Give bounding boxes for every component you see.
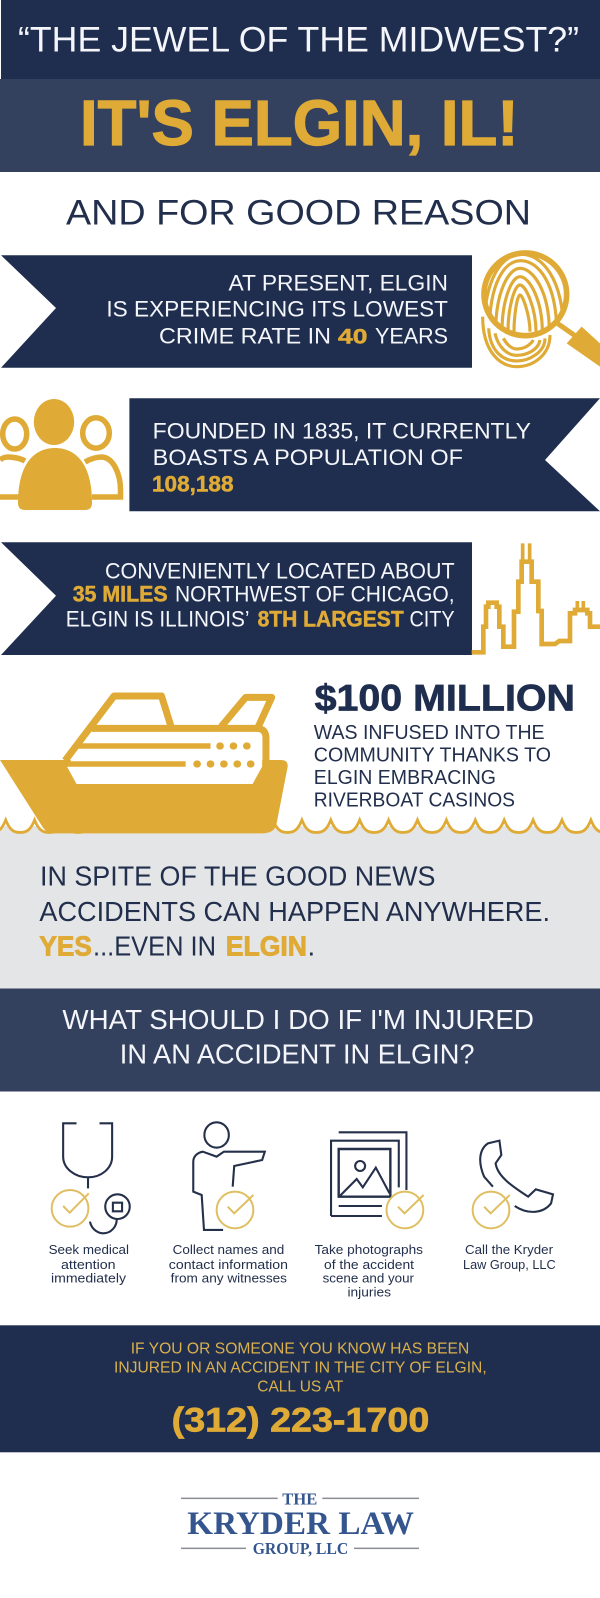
caption: collect names: Collect names and bbox=[173, 1243, 284, 1257]
call to action text: IF YOU OR SOMEONE YOU KNOW HAS BEEN bbox=[131, 1340, 469, 1357]
panel: call to action bbox=[0, 1325, 600, 1452]
icon: group of people bbox=[0, 399, 120, 510]
icon: magnifying glass over fingerprint bbox=[483, 253, 600, 367]
call to action text bbox=[114, 1340, 487, 1395]
icon: person pointing bbox=[193, 1122, 265, 1230]
caption: take photographs: Take photographs bbox=[315, 1243, 423, 1257]
caption: seek medical attention: attention bbox=[61, 1258, 116, 1272]
icon: telephone bbox=[473, 1141, 553, 1228]
crime rate text: IS EXPERIENCING ITS LOWEST bbox=[106, 297, 448, 322]
population text: BOASTS A POPULATION OF bbox=[153, 445, 463, 470]
caption: seek medical attention: immediately bbox=[51, 1272, 127, 1286]
text: accidents can happen: YES bbox=[39, 931, 92, 962]
crime rate text: 40 bbox=[338, 325, 367, 349]
crime rate text bbox=[106, 270, 448, 349]
callout: $100 million: RIVERBOAT CASINOS bbox=[314, 789, 515, 812]
logo: The Kryder Law Group: KRYDER LAW bbox=[187, 1506, 414, 1542]
question text: WHAT SHOULD I DO IF I'M INJURED bbox=[62, 1004, 534, 1035]
location text: CONVENIENTLY LOCATED ABOUT bbox=[105, 558, 455, 583]
callout: $100 million: ELGIN EMBRACING bbox=[314, 766, 496, 789]
panel: question banner bbox=[0, 988, 600, 1092]
callout: $100 million: COMMUNITY THANKS TO bbox=[314, 744, 551, 767]
location text bbox=[66, 558, 455, 632]
step captions bbox=[49, 1243, 556, 1300]
logo: The Kryder Law Group bbox=[181, 1489, 419, 1558]
text: accidents can happen: ...EVEN IN bbox=[93, 931, 216, 962]
panel: crime rate bbox=[1, 255, 472, 368]
caption: take photographs: scene and your bbox=[323, 1272, 414, 1286]
panel: population bbox=[129, 398, 600, 511]
header banner bbox=[0, 0, 600, 172]
subheading: AND FOR GOOD REASON bbox=[66, 193, 531, 232]
headline: it's Elgin: IT'S ELGIN, IL! bbox=[80, 87, 518, 159]
gray band with wave bbox=[0, 812, 600, 988]
call to action text: CALL US AT bbox=[257, 1378, 344, 1395]
caption: collect names: contact information bbox=[169, 1258, 288, 1272]
population text bbox=[152, 418, 531, 497]
title: the jewel of the midwest: “THE JEWEL OF THE MIDWEST?” bbox=[18, 20, 579, 60]
population text: FOUNDED IN 1835, IT CURRENTLY bbox=[153, 418, 531, 443]
icon: photographs bbox=[331, 1132, 424, 1228]
caption: call the firm: Call the Kryder bbox=[465, 1243, 553, 1257]
population text: 108,188 bbox=[152, 472, 234, 497]
text: accidents can happen: ELGIN bbox=[226, 931, 307, 962]
callout: $100 million: $100 MILLION bbox=[315, 678, 575, 719]
icon: riverboat bbox=[0, 696, 288, 833]
location text: CITY bbox=[410, 607, 455, 632]
text: accidents can happen: IN SPITE OF THE GOOD NEWS bbox=[40, 861, 436, 892]
crime rate text: AT PRESENT, ELGIN bbox=[228, 270, 448, 295]
caption: take photographs bbox=[315, 1243, 423, 1300]
icon: Chicago skyline bbox=[472, 543, 600, 652]
caption: call the firm bbox=[463, 1243, 556, 1272]
callout: $100 million: WAS INFUSED INTO THE bbox=[314, 721, 545, 744]
logo: The Kryder Law Group: THE bbox=[282, 1489, 317, 1508]
caption: collect names bbox=[169, 1243, 288, 1286]
location text: ELGIN IS ILLINOIS’ bbox=[66, 607, 250, 632]
caption: take photographs: injuries bbox=[348, 1286, 391, 1300]
caption: take photographs: of the accident bbox=[324, 1258, 415, 1272]
text: accidents can happen: ACCIDENTS CAN HAPPEN ANYWHERE. bbox=[39, 896, 550, 927]
location text: 8TH LARGEST bbox=[258, 607, 404, 632]
caption: seek medical attention: Seek medical bbox=[49, 1243, 129, 1257]
call to action text: INJURED IN AN ACCIDENT IN THE CITY OF ELGIN, bbox=[114, 1359, 487, 1376]
icon: stethoscope bbox=[52, 1123, 130, 1233]
location text: 35 MILES bbox=[73, 582, 168, 607]
location text: NORTHWEST OF CHICAGO, bbox=[175, 582, 455, 607]
caption: collect names: from any witnesses bbox=[171, 1272, 287, 1286]
panel: location bbox=[1, 542, 472, 655]
caption: call the firm: Law Group, LLC bbox=[463, 1258, 556, 1272]
crime rate text: CRIME RATE IN bbox=[159, 324, 331, 349]
crime rate text: YEARS bbox=[375, 324, 448, 349]
phone number: (312) 223-1700 bbox=[172, 1402, 429, 1440]
question text bbox=[62, 1004, 534, 1069]
text: accidents can happen: . bbox=[308, 931, 315, 962]
question text: IN AN ACCIDENT IN ELGIN? bbox=[120, 1038, 475, 1069]
callout: $100 million bbox=[314, 678, 575, 812]
logo: The Kryder Law Group: GROUP, LLC bbox=[253, 1539, 348, 1558]
text: accidents can happen bbox=[39, 861, 550, 962]
caption: seek medical attention bbox=[49, 1243, 129, 1286]
